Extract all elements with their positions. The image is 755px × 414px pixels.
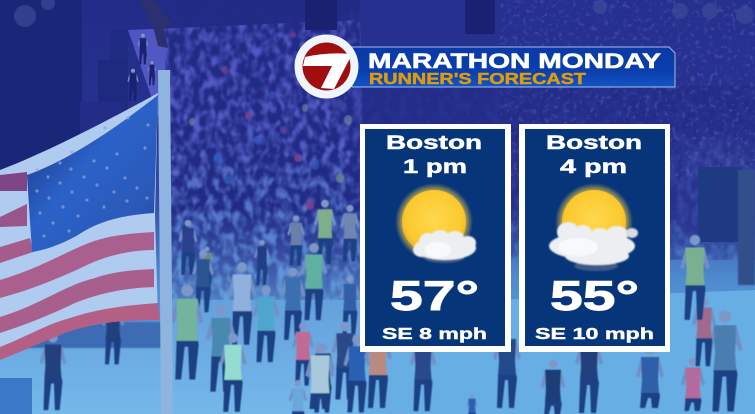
wind: SE 8 mph: [382, 326, 487, 343]
flag canton: [27, 95, 158, 252]
lanterns: [14, 0, 754, 27]
icon: sun with large cloud: [549, 183, 638, 271]
wind: SE 10 mph: [535, 326, 654, 343]
station logo: 7: [294, 34, 358, 98]
heading: Marathon Monday: MARATHON MONDAY: [368, 50, 661, 73]
lower crowd runners: [40, 200, 742, 414]
American flag with pole: [0, 70, 173, 414]
coloured runner tops in the dense crowd: [189, 32, 352, 210]
panel: Boston 4 pm: [519, 124, 670, 352]
panel: Boston 1 pm: [360, 124, 511, 352]
spectators on sidewalk: [127, 34, 156, 101]
location label: Boston: [546, 132, 642, 154]
statue atop the flagpole: [140, 0, 172, 48]
temperature: 55°: [550, 272, 639, 319]
subheading: Runner's Forecast: RUNNER'S FORECAST: [369, 71, 587, 88]
time label: 1 pm: [403, 156, 467, 178]
time label: 4 pm: [560, 156, 627, 178]
location label: Boston: [386, 132, 482, 154]
icon: sun with small cloud: [395, 183, 476, 263]
temperature: 57°: [390, 272, 479, 319]
title banner: [352, 47, 675, 88]
